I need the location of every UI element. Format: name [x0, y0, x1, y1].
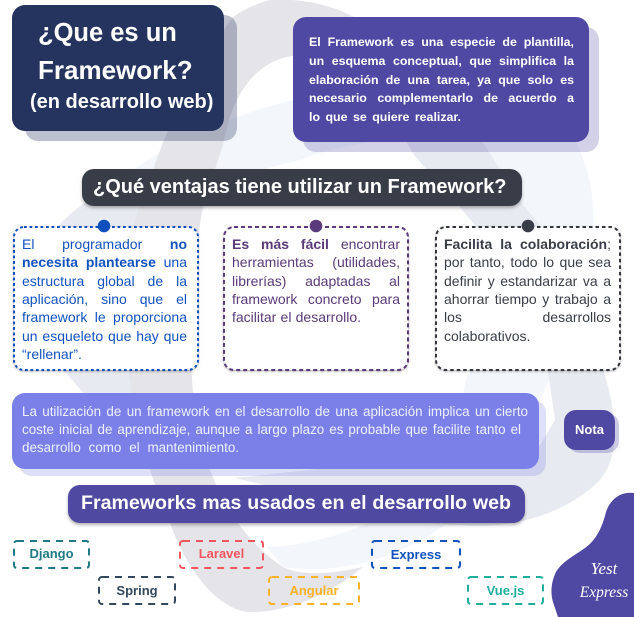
definition text [309, 35, 574, 124]
card 2 text: Es más fácil encontrar [232, 236, 400, 252]
tag: Spring [99, 577, 175, 604]
card 1 text: aplicación, sino que el [22, 291, 187, 307]
title panel [12, 5, 237, 141]
title line 2: Framework? [38, 55, 193, 85]
card 1 text: El programador no [22, 236, 187, 252]
card 2 border and dot [222, 220, 410, 374]
tag: Express: Express [391, 547, 441, 562]
brand text: Express [579, 584, 628, 601]
card: es más fácil [222, 220, 410, 374]
card: no necesita plantearse [12, 220, 200, 373]
card 3 text: colaborativos. [444, 328, 530, 344]
tag: Angular: Angular [289, 583, 339, 598]
heading: ventajas [82, 169, 522, 206]
brand text [579, 559, 628, 601]
card 1 text: estructura global de la [22, 273, 187, 289]
note panel [12, 393, 546, 476]
note text [22, 404, 528, 455]
card 2 text: facilitar el desarrollo. [232, 309, 361, 325]
card 1 text [22, 236, 188, 362]
card 3 text: por tanto, todo lo que sea [444, 254, 611, 270]
heading: ventajas: ¿Qué ventajas tiene utilizar un Framework? [93, 176, 506, 198]
heading: frameworks [68, 485, 525, 523]
note panel body [12, 393, 539, 469]
card 1 text: necesita plantearse una [22, 254, 187, 270]
card 2 text: framework concreto para [232, 291, 400, 307]
card: facilita la colaboración [434, 220, 622, 373]
note text: desarrollo como el mantenimiento. [22, 440, 239, 455]
definition text: un esquema conceptual, que simplifica la [309, 54, 574, 68]
note badge body [564, 410, 615, 450]
definition text: El Framework es una especie de plantilla, [309, 35, 574, 49]
card 3 text: los desarrollos [444, 309, 611, 325]
title panel shadow [25, 15, 237, 141]
card 3 border and dot [434, 220, 622, 373]
card 1 text: framework le proporciona [22, 309, 187, 325]
note badge shadow [568, 413, 619, 453]
definition panel body [293, 17, 589, 142]
card 2 text [232, 236, 400, 325]
tag: Vue.js [468, 577, 543, 604]
note badge [564, 410, 619, 453]
note badge label: Nota [575, 422, 604, 437]
tag: Angular [269, 577, 359, 604]
definition text: lo que se quiere realizar. [309, 110, 461, 124]
brand text: Yest [591, 559, 619, 578]
title line 1: ¿Que es un [38, 19, 177, 47]
tag: Django [14, 541, 89, 568]
definition panel shadow [303, 27, 599, 152]
tag: Vue.js: Vue.js [487, 583, 524, 598]
card 3 text: definir y estandarizar va a [444, 273, 611, 289]
tag: Spring: Spring [116, 583, 158, 598]
note panel shadow [19, 400, 546, 476]
tag: Express [372, 541, 460, 568]
card 1 border and dot [12, 220, 200, 373]
definition text: elaboración de una tarea, ya que solo es [309, 73, 574, 87]
card 3 text: Facilita la colaboración; [444, 236, 611, 252]
heading: frameworks: Frameworks mas usados en el desarrollo web [81, 492, 511, 514]
definition text: necesario complementarlo de acuerdo a [309, 91, 574, 105]
title panel body [12, 5, 224, 131]
card 1 text: un esqueleto que hay que [22, 328, 187, 344]
note text: coste inicial de aprendizaje, aunque a largo plazo es probable que facilite tanto el [22, 422, 521, 437]
tag: Laravel: Laravel [199, 546, 244, 561]
card 2 text: librerías) adaptadas al [232, 273, 400, 289]
card 3 text [444, 236, 612, 344]
tag: Laravel [180, 541, 263, 568]
card 1 text: “rellenar”. [22, 346, 82, 362]
card 3 text: ahorrar tiempo y trabajo a [444, 291, 611, 307]
title line 3: (en desarrollo web) [30, 91, 213, 113]
card 2 text: herramientas (utilidades, [232, 254, 400, 270]
tag: Django: Django [29, 546, 74, 561]
definition panel [293, 17, 599, 152]
note text: La utilización de un framework en el desarrollo de una aplicación implica un cierto [22, 404, 528, 419]
